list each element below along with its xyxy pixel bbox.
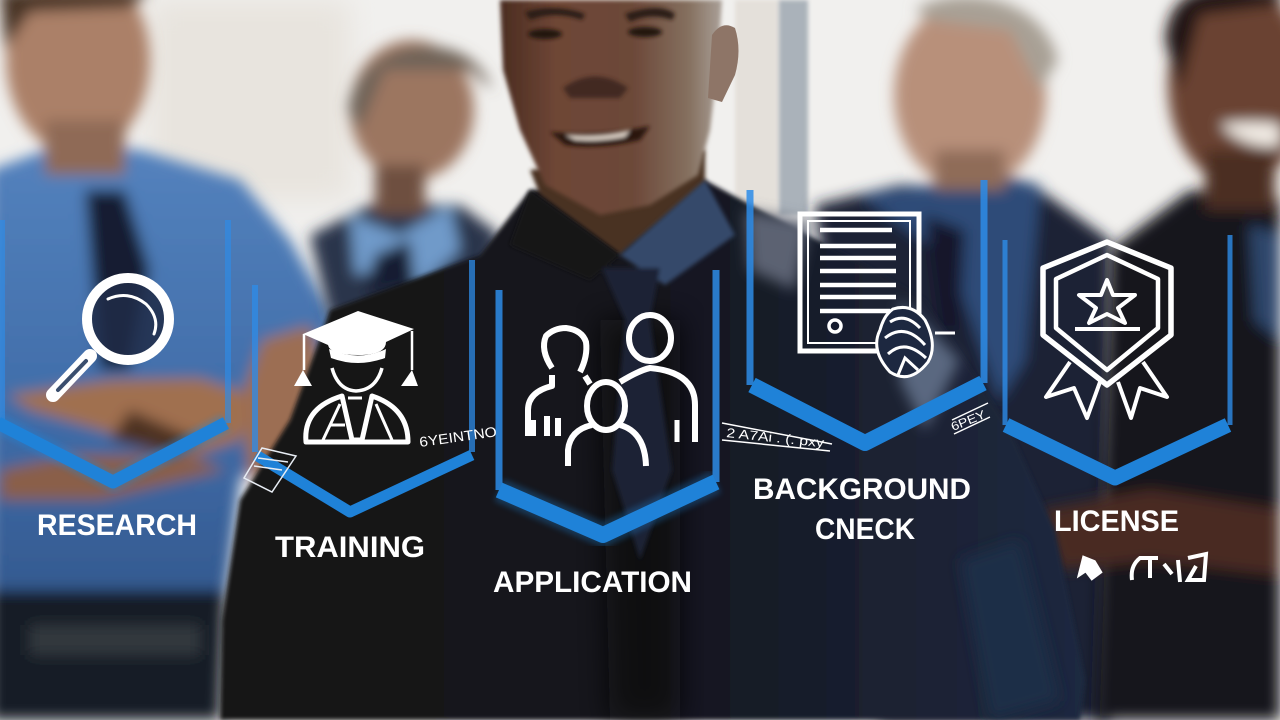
ear [708,25,738,102]
wax seal [877,307,955,377]
icon: certificate with seal [800,214,955,377]
glitch caption between background check and license [949,403,990,434]
label: background: BACKGROUND [753,473,971,506]
broken corner tag [244,448,296,492]
nose [563,76,628,98]
shirt collar and tie [510,180,735,560]
frame: application [499,270,716,535]
label: application: APPLICATION [493,566,692,599]
central officer head [500,0,722,215]
icon: graduate with cap [294,311,418,442]
label: training: TRAINING [275,531,425,564]
button placket shadow [600,320,680,720]
photo: central smiling officer [220,0,1085,720]
photo: blurred man at right [815,0,1110,720]
frame: training [255,260,472,512]
frame: license [1005,235,1230,478]
photo: blurred woman at far right [1040,0,1280,720]
smile [550,126,650,147]
icon: shield badge with star [1043,242,1171,418]
glitch caption between application and background check: 2 A7Ai . (. pxy [726,425,825,450]
frame: research [0,220,228,482]
eyes and brows [525,8,675,39]
frame: background check [750,180,984,443]
icon: magnifying glass [53,278,169,395]
icon: group of people [528,315,695,466]
label: check: CNECK [815,513,915,546]
central officer neck [530,150,705,255]
photo: blurred officer at left [0,0,335,720]
label: research: RESEARCH [37,509,197,542]
glitch caption between application and background check [722,423,832,451]
glitch caption between training and application: 6YEINTNO [418,423,498,450]
label: license: LICENSE [1054,505,1179,538]
garbled caption under license [1080,554,1206,582]
light creases on the uniform [745,210,1060,720]
central officer uniform [220,180,1085,720]
photo: blurred person in background, centre left [310,40,500,320]
glitch caption between background check and license: 6PEY [949,407,988,434]
